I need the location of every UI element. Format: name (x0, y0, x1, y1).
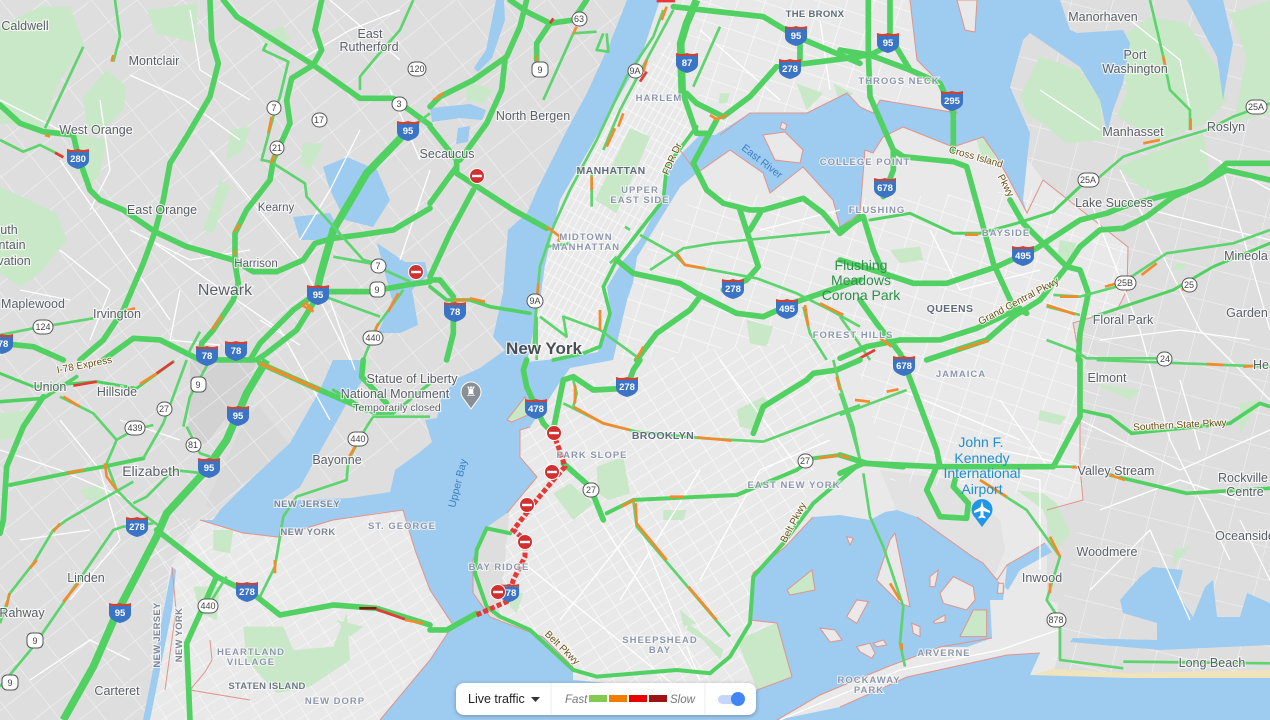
interstate shields: 78 (506, 588, 516, 599)
place labels: cities: Statue of Liberty (366, 372, 458, 386)
neighbourhood labels: STATEN ISLAND (228, 681, 306, 692)
traffic: New Jersey north roads (0, 0, 430, 360)
neighbourhood labels: ROCKAWAY (837, 675, 901, 686)
neighbourhood labels: NEW JERSEY (274, 499, 340, 510)
place labels: cities: Floral Park (1093, 313, 1154, 327)
place labels: cities: Newark (198, 282, 253, 299)
water: Hudson, Upper Bay, Newark Bay, Narrows, Jamaica Bay (200, 0, 1052, 720)
legend: slow label: Slow (670, 694, 696, 706)
neighbourhood labels: NEW JERSEY (152, 602, 163, 668)
place labels: cities: National Monument (341, 387, 450, 401)
neighbourhood labels: EAST SIDE (610, 195, 670, 206)
place labels: cities: Woodmere (1077, 545, 1137, 559)
place labels: cities: Linden (67, 571, 105, 585)
interstate shields: 478 (528, 404, 544, 415)
road and water labels: Belt Pkwy (779, 501, 809, 545)
road and water labels: Pkwy (995, 173, 1016, 199)
sand: Long Beach shoreline (1030, 669, 1270, 678)
place labels: cities: Port (1124, 48, 1147, 62)
route shields: 440 (200, 601, 216, 611)
traffic: Queens and Long Island roads (840, 0, 1270, 360)
legend: fast label: Fast (565, 694, 588, 706)
place labels: cities: Manorhaven (1068, 10, 1138, 24)
place labels: cities: East (357, 27, 383, 41)
place labels: cities: Garden (1226, 306, 1268, 320)
water: Atlantic Ocean (777, 653, 1270, 720)
place labels: cities: Carteret (94, 684, 140, 698)
place labels: cities: Harrison (234, 258, 278, 270)
place labels: cities: Lake Success (1075, 196, 1153, 210)
water: East River and Long Island Sound (527, 0, 1130, 368)
road and water labels: Southern State Pkwy (1133, 418, 1227, 433)
land: Staten Island (150, 507, 453, 720)
interstate shields: 278 (129, 522, 145, 533)
neighbourhood labels: MANHATTAN (576, 165, 646, 177)
interstate shields: 78 (202, 351, 212, 362)
islands and coastal outlines (847, 533, 1003, 658)
traffic: Hudson crossings and Manhattan roads (430, 0, 860, 360)
neighbourhood labels: BAYSIDE (982, 228, 1030, 239)
neighbourhood labels: FOREST HILLS (813, 330, 893, 341)
icon: Statue of Liberty pin (461, 382, 481, 409)
route shields: 440 (365, 333, 381, 343)
route shields: 9A (629, 66, 641, 76)
interstate shields (0, 26, 1034, 623)
place labels: cities: Caldwell (1, 19, 49, 33)
route shields: 25A (1248, 102, 1264, 112)
place labels: cities: Secaucus (420, 147, 474, 161)
neighbourhood labels: HARLEM (636, 93, 682, 104)
interstate shields: 278 (239, 587, 255, 598)
neighbourhood labels: PARK (854, 685, 884, 696)
place labels: cities: He (1253, 358, 1269, 372)
neighbourhood labels: SHEEPSHEAD (622, 635, 698, 646)
place labels: cities: Bayonne (312, 453, 362, 467)
place labels: cities: Montclair (129, 54, 179, 68)
interstate shields: 678 (877, 183, 893, 194)
place labels: cities: Irvington (93, 307, 141, 321)
place labels: cities: Rockville (1218, 471, 1268, 485)
neighbourhood labels: BAY RIDGE (469, 562, 529, 573)
interstate shields: 280 (70, 154, 86, 165)
place labels: cities: Hillside (97, 385, 137, 399)
interstate shields: 78 (450, 307, 460, 318)
neighbourhood labels: EAST NEW YORK (747, 480, 841, 491)
place labels: cities: North Bergen (496, 109, 570, 123)
neighbourhood labels: MIDTOWN (559, 232, 613, 243)
incident closure icons (408, 168, 562, 600)
neighbourhood labels: ST. GEORGE (368, 521, 436, 532)
interstate shields: 678 (896, 361, 912, 372)
interstate shields: 87 (682, 58, 692, 69)
label: JFK airport: International (943, 465, 1021, 481)
place labels: cities: Valley Stream (1078, 464, 1154, 478)
interstate shields: 278 (725, 284, 741, 295)
route shields: 25A (1080, 175, 1096, 185)
interstate shields: 95 (115, 608, 126, 619)
route shields: 9 (195, 380, 201, 390)
interstate shields: 78 (231, 346, 241, 357)
interstate shields: 495 (779, 304, 796, 315)
route shields: 9 (537, 65, 543, 75)
interstate shields: 95 (403, 126, 414, 137)
neighbourhood labels: THE BRONX (786, 9, 845, 20)
traffic: Brooklyn roads (430, 360, 860, 677)
road and water labels: Upper Bay (446, 457, 470, 509)
neighbourhood labels: BAY (649, 645, 671, 656)
route shields: 7 (271, 103, 277, 113)
neighbourhood labels: NEW YORK (280, 527, 336, 538)
icon: airport pin (972, 499, 993, 527)
route shields: 24 (1160, 354, 1170, 364)
road and water labels (56, 141, 1227, 667)
label: Flushing Meadows Corona Park: Meadows (831, 272, 891, 288)
place labels: cities: Long Beach (1179, 656, 1245, 670)
interstate shields: 95 (233, 411, 244, 422)
route shields: 120 (409, 64, 425, 74)
route shields: 9 (374, 285, 380, 295)
route shields: 878 (1048, 615, 1064, 625)
traffic: JFK, Nassau and south shore roads (840, 360, 1270, 668)
interstate shields: 495 (1015, 251, 1032, 262)
route shields: 81 (188, 440, 198, 450)
traffic: Union, Elizabeth, Staten Island roads (0, 360, 430, 720)
label: JFK airport: Kennedy (954, 450, 1010, 466)
route shields: 27 (586, 485, 596, 495)
neighbourhood labels: COLLEGE POINT (820, 157, 910, 168)
neighbourhood labels: NEW YORK (174, 608, 185, 662)
interstate shields: 95 (313, 290, 324, 301)
neighbourhood labels: THROGS NECK (858, 76, 940, 87)
label: Flushing Meadows Corona Park (822, 257, 901, 303)
route shields: 25 (1184, 280, 1194, 290)
place labels: cities: New York (506, 339, 582, 358)
neighbourhood labels: PARK SLOPE (556, 450, 628, 461)
neighbourhood labels: ARVERNE (917, 648, 971, 659)
route shields: 440 (350, 434, 366, 444)
shoreline borders (165, 0, 1128, 720)
route shields: 9 (7, 678, 13, 688)
interstate shields: 278 (782, 64, 798, 75)
legend panel (456, 683, 756, 715)
land: Newark airport and port areas (188, 360, 1005, 575)
neighbourhood labels: MANHATTAN (552, 242, 620, 253)
place labels: cities: Kearny (258, 202, 294, 214)
route shields: 439 (127, 423, 143, 433)
road and water labels: Grand Central Pkwy (977, 276, 1061, 328)
route shields: 3 (396, 99, 402, 109)
islands: Rikers, City Island, Statue and Governors (507, 0, 977, 642)
place labels: cities: Elizabeth (122, 463, 180, 479)
label: Flushing Meadows Corona Park: Flushing (835, 257, 887, 273)
place labels: cities: uth (0, 223, 18, 237)
label: JFK airport (943, 434, 1021, 497)
place labels: cities: Elmont (1088, 371, 1127, 385)
place labels: cities: West Orange (59, 123, 133, 137)
label: JFK airport: John F. (958, 434, 1004, 450)
place labels: cities: East Orange (127, 203, 197, 217)
place labels: cities: Centre (1226, 485, 1264, 499)
road and water labels: FDR Dr (661, 141, 685, 177)
interstate shields: 95 (204, 463, 215, 474)
route shields: 17 (314, 115, 324, 125)
route shields: 27 (800, 456, 810, 466)
legend: colour ramp (589, 695, 667, 702)
route shields: 27 (159, 404, 169, 414)
place labels: cities: Temporarily closed (353, 402, 441, 414)
place labels: cities: Washington (1102, 62, 1168, 76)
legend: dropdown arrow (531, 697, 540, 702)
road and water labels: Cross Island (947, 145, 1004, 171)
neighbourhood labels: FLUSHING (849, 205, 905, 216)
neighbourhood labels: VILLAGE (227, 657, 275, 668)
icon: Statue of Liberty pin: ♜ (465, 385, 477, 400)
water: South Shore channels (1070, 567, 1270, 650)
route shields: 21 (272, 143, 282, 153)
neighbourhood labels: BROOKLYN (632, 430, 694, 442)
route shields: 9 (32, 636, 38, 646)
label: Flushing Meadows Corona Park: Corona Park (822, 287, 901, 303)
neighbourhood labels: NEW DORP (305, 696, 365, 707)
legend: toggle (718, 692, 745, 706)
neighbourhood labels: UPPER (621, 185, 659, 196)
incident: dashed congestion on Gowanus (477, 433, 565, 615)
neighbourhood labels: QUEENS (927, 303, 973, 315)
place labels: cities: Inwood (1022, 571, 1062, 585)
road and water labels: East River (739, 142, 785, 182)
water: Hackensack and Passaic rivers, Arthur Kill (143, 0, 505, 720)
route shields: 124 (35, 322, 51, 332)
route shields: 9A (529, 296, 541, 306)
land: New York City boroughs (490, 0, 1128, 720)
place labels: cities: Rutherford (339, 40, 399, 54)
route shields: 25B (1117, 278, 1133, 288)
place labels: cities: Union (34, 380, 66, 394)
interstate shields: 278 (619, 382, 635, 393)
road and water labels: Belt Pkwy (542, 629, 581, 667)
route shields: 7 (375, 261, 381, 271)
place labels: cities: Manhasset (1102, 125, 1164, 139)
road and water labels: I-78 Express (56, 355, 113, 376)
place labels: cities: Rahway (0, 606, 45, 620)
water: Hempstead Harbor (1187, 0, 1233, 100)
place labels: cities: Roslyn (1207, 120, 1245, 134)
label: JFK airport: Airport (961, 481, 1003, 497)
interstate shields: 95 (883, 38, 894, 49)
neighbourhood labels: HEARTLAND (217, 647, 285, 658)
interstate shields: 295 (944, 96, 961, 107)
legend: mode selector: Live traffic (468, 692, 525, 706)
neighbourhood labels (152, 9, 1030, 707)
place labels: cities: Maplewood (1, 297, 65, 311)
route shields: 63 (574, 14, 584, 24)
interstate shields: 95 (791, 31, 802, 42)
neighbourhood labels: JAMAICA (936, 369, 986, 380)
place labels: cities: Mineola (1224, 249, 1268, 263)
